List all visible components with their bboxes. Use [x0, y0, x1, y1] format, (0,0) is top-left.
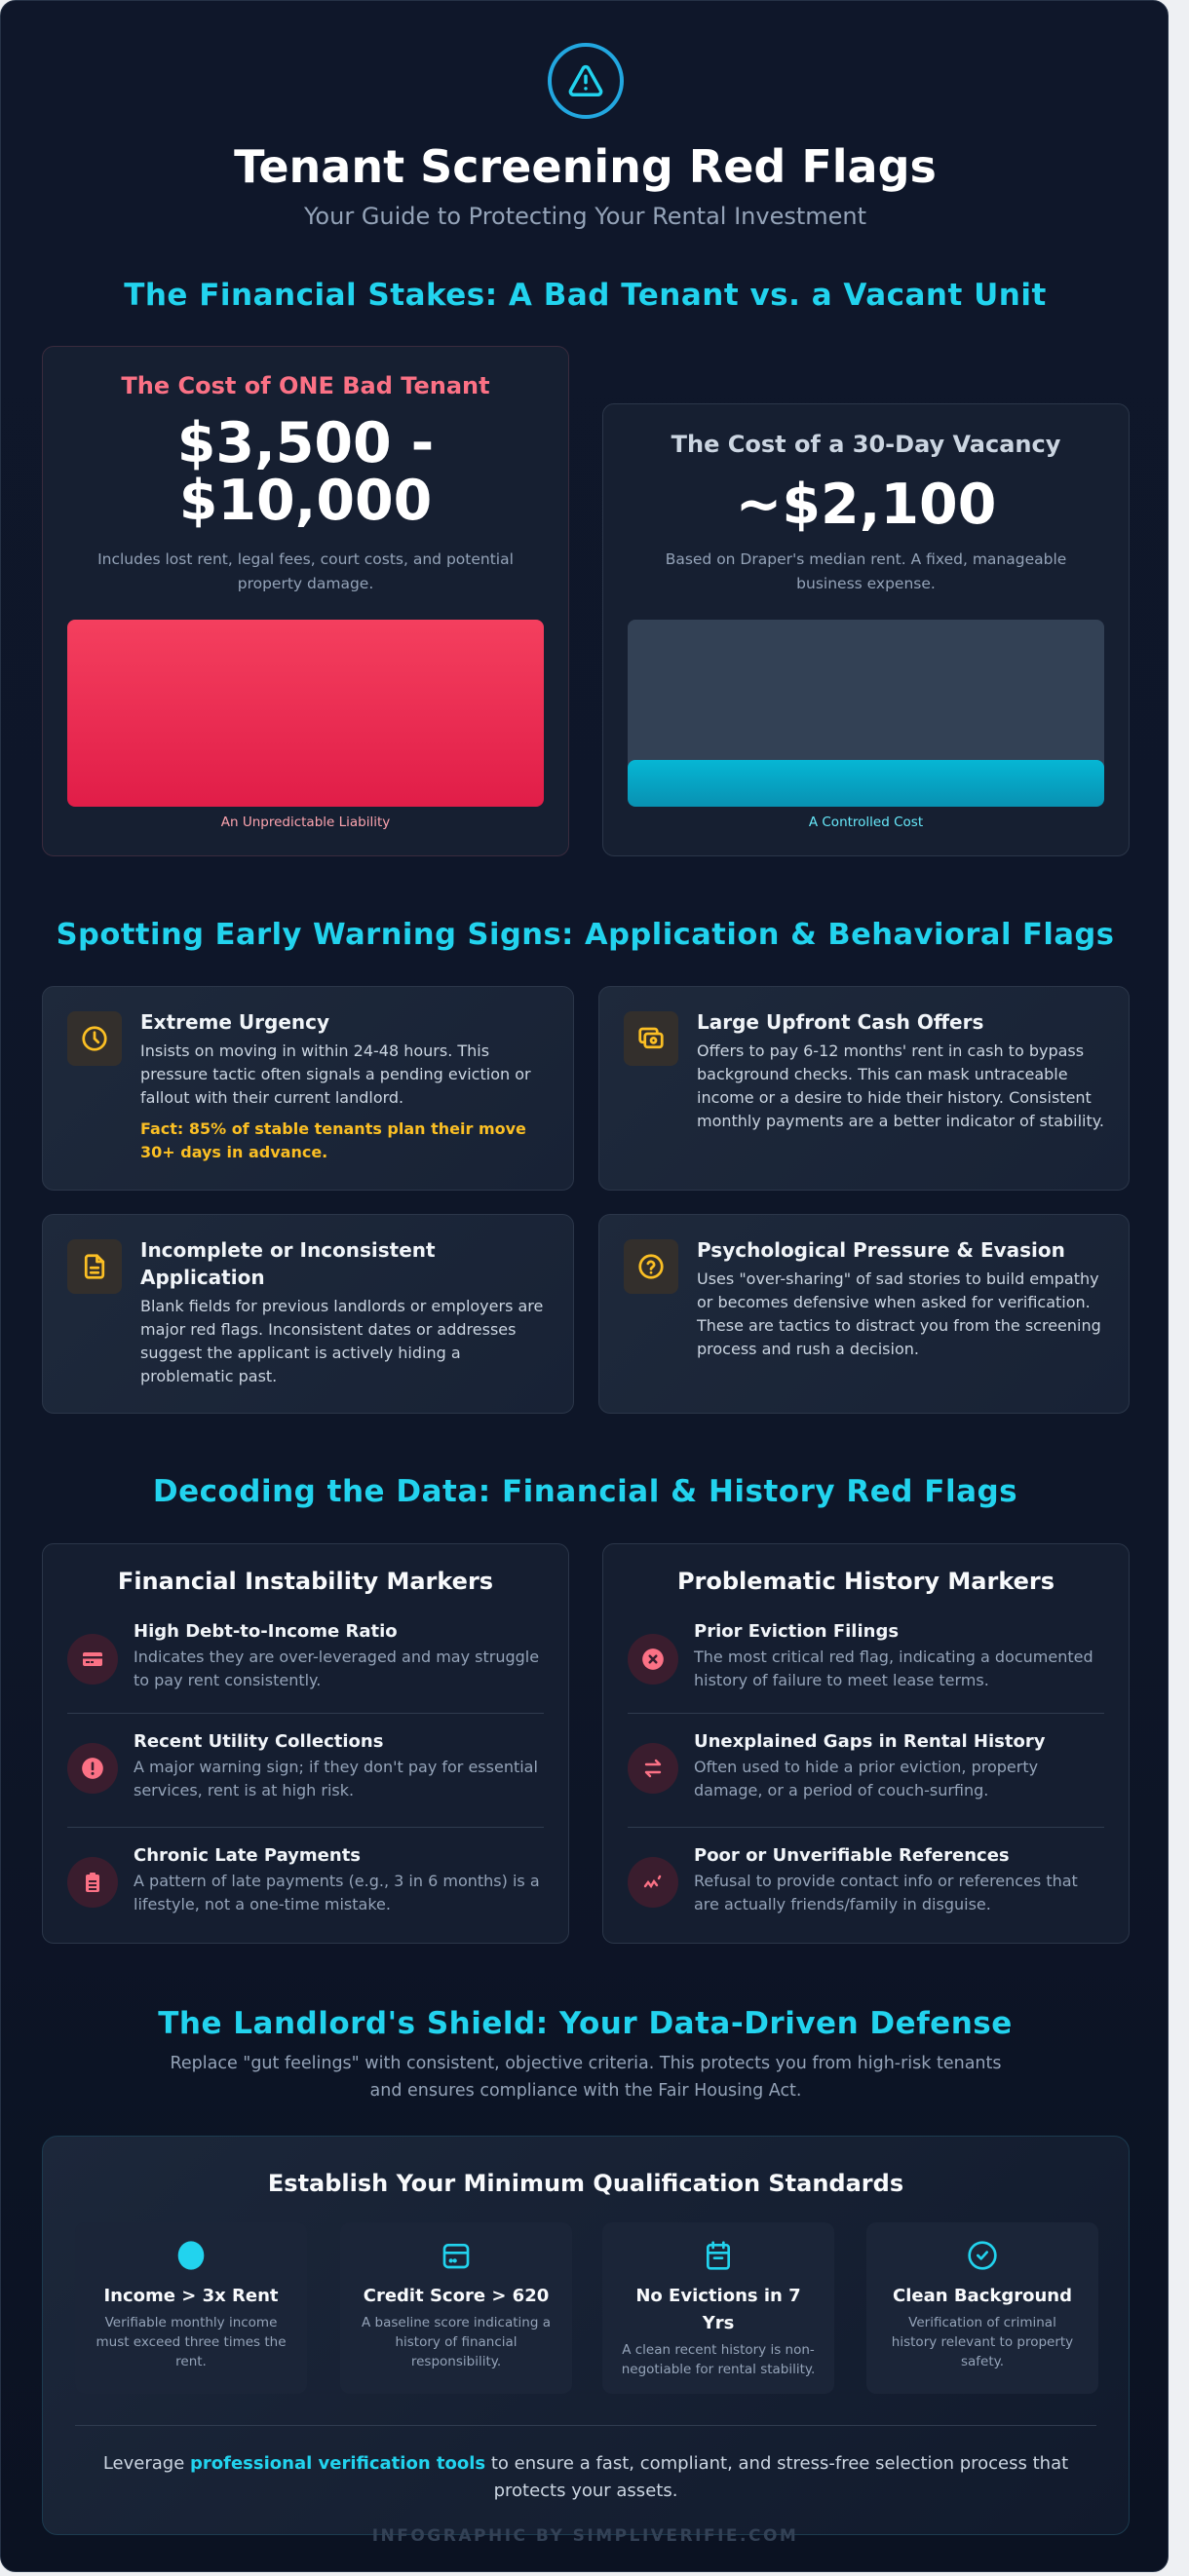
panel: vacancy cost: ~$2,100 [736, 473, 996, 537]
card: background: Verification of criminal history relevant to property safety. [892, 2315, 1073, 2369]
card: incomplete application [42, 1214, 574, 1414]
card: credit: A baseline score indicating a history of financial responsibility. [362, 2315, 551, 2369]
card: evictions: No Evictions in 7 Yrs [635, 2286, 801, 2333]
panel: vacancy cost [602, 403, 1130, 856]
card: evictions [602, 2222, 834, 2394]
card: incomplete application: Incomplete or Inconsistent Application [140, 1238, 436, 1289]
panel: vacancy cost: Based on Draper's median rent. A fixed, manageable business expense. [666, 550, 1066, 592]
text: shield intro: Replace "gut feelings" with consistent, objective criteria. This protects you from high-risk tenants and ensures compliance with the Fair Housing Act. [170, 2054, 1002, 2101]
panel: history markers: Problematic History Markers [677, 1568, 1055, 1595]
item: late payments: A pattern of late payments (e.g., 3 in 6 months) is a lifestyle, not a one-time mistake. [134, 1872, 540, 1913]
text: verification callout: Leverage professional verification tools to ensure a fast, compliant, and stress-free selection process that protects your assets. [103, 2453, 1068, 2501]
heading: warning signs: Spotting Early Warning Signs: Application & Behavioral Flags [57, 918, 1114, 952]
card: cash offers: Large Upfront Cash Offers [697, 1010, 983, 1034]
card: extreme urgency: Extreme Urgency [140, 1010, 329, 1034]
icon: warning [548, 43, 624, 119]
panel: financial instability [42, 1543, 569, 1944]
card: evictions: A clean recent history is non-negotiable for rental stability. [622, 2342, 815, 2377]
item: references: Refusal to provide contact info or references that are actually friends/family in disguise. [694, 1872, 1078, 1913]
item: debt ratio: High Debt-to-Income Ratio [134, 1621, 398, 1642]
card: credit [340, 2222, 572, 2394]
card: income: Verifiable monthly income must exceed three times the rent. [96, 2315, 287, 2369]
panel: vacancy cost: A Controlled Cost [809, 814, 923, 830]
item: eviction filings: The most critical red flag, indicating a documented history of failure to meet lease terms. [694, 1648, 1093, 1689]
item: late payments: Chronic Late Payments [134, 1845, 361, 1866]
card: extreme urgency [42, 986, 574, 1191]
subtitle: Your Guide to Protecting Your Rental Investment [304, 203, 866, 230]
panel: history markers [602, 1543, 1130, 1944]
panel: financial instability: Financial Instability Markers [118, 1568, 493, 1595]
bar: liability [67, 620, 544, 807]
footer: INFOGRAPHIC BY SIMPLIVERIFIE.COM [372, 2526, 798, 2546]
bar: controlled cost [628, 620, 1104, 807]
card: extreme urgency: Fact: 85% of stable tenants plan their move 30+ days in advance. [140, 1119, 526, 1161]
item: references [628, 1827, 1104, 1941]
panel: bad tenant cost: $10,000 [179, 469, 432, 533]
card: credit: Credit Score > 620 [364, 2286, 549, 2306]
card: extreme urgency: Insists on moving in within 24-48 hours. This pressure tactic often signals a pending eviction or fallout with their current landlord. [140, 1042, 531, 1107]
item: references: Poor or Unverifiable References [694, 1845, 1010, 1866]
card: psychological pressure [598, 1214, 1130, 1414]
panel: bad tenant cost [42, 346, 569, 856]
item: debt ratio [67, 1621, 539, 1689]
card: income: Income > 3x Rent [103, 2286, 279, 2306]
item: eviction filings [628, 1621, 1093, 1689]
card: psychological pressure: Uses "over-sharing" of sad stories to build empathy or becomes defensive when asked for verification. These are tactics to distract you from the screening process and rush a decision. [697, 1269, 1101, 1358]
card: cash offers [598, 986, 1130, 1191]
panel: bad tenant cost: $3,500 - [177, 411, 434, 475]
panel: qualification standards [42, 2136, 1130, 2535]
panel: bad tenant cost: The Cost of ONE Bad Tenant [121, 372, 490, 399]
item: debt ratio: Indicates they are over-leveraged and may struggle to pay rent consistently. [134, 1648, 539, 1689]
item: rental gaps: Often used to hide a prior eviction, property damage, or a period of couch-surfing. [694, 1758, 1038, 1799]
panel: bad tenant cost: An Unpredictable Liability [221, 814, 390, 830]
card: incomplete application: Blank fields for previous landlords or employers are major red flags. Inconsistent dates or addresses suggest the applicant is actively hiding a problematic past. [140, 1297, 543, 1385]
heading: landlord's shield: The Landlord's Shield: Your Data-Driven Defense [158, 2006, 1013, 2041]
card: background: Clean Background [893, 2286, 1072, 2306]
item: eviction filings: Prior Eviction Filings [694, 1621, 899, 1642]
card: psychological pressure: Psychological Pressure & Evasion [697, 1238, 1065, 1262]
heading: financial stakes: The Financial Stakes: A Bad Tenant vs. a Vacant Unit [124, 278, 1047, 313]
panel: qualification standards: Establish Your Minimum Qualification Standards [268, 2170, 903, 2197]
title: Tenant Screening Red Flags [234, 140, 937, 193]
item: rental gaps: Unexplained Gaps in Rental History [694, 1731, 1045, 1752]
item: late payments [67, 1827, 544, 1941]
item: utility collections: A major warning sign; if they don't pay for essential services, rent is at high risk. [134, 1758, 538, 1799]
item: utility collections: Recent Utility Collections [134, 1731, 383, 1752]
panel: vacancy cost: The Cost of a 30-Day Vacancy [671, 431, 1060, 458]
item: utility collections [67, 1713, 544, 1827]
card: income [75, 2222, 307, 2394]
card: background [866, 2222, 1098, 2394]
heading: decoding data: Decoding the Data: Financial & History Red Flags [153, 1474, 1017, 1509]
item: rental gaps [628, 1713, 1104, 1827]
card: cash offers: Offers to pay 6-12 months' rent in cash to bypass background checks. This can mask untraceable income or a desire to hide their history. Consistent monthly payments are a better indicator of stability. [697, 1042, 1104, 1130]
panel: bad tenant cost: Includes lost rent, legal fees, court costs, and potential property damage. [97, 550, 514, 592]
